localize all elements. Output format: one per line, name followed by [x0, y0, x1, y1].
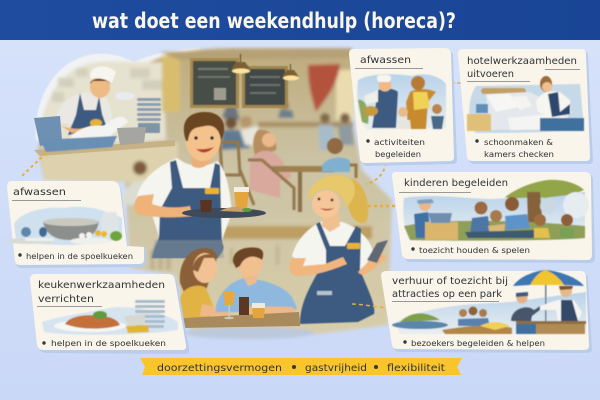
steel pot	[117, 127, 146, 145]
ribbon: qualities: flexibiliteit	[387, 363, 445, 374]
heading	[392, 276, 508, 302]
bullet text: toezicht houden & spelen	[419, 245, 530, 255]
bottles shelf	[150, 242, 303, 270]
ribbon: qualities: gastvrijheid	[305, 363, 367, 374]
heading: verhuur of toezicht bij	[392, 276, 508, 287]
illustration: bowl and bottle	[6, 207, 122, 245]
heading	[467, 56, 580, 82]
bullet text: activiteiten	[374, 137, 425, 147]
heading	[399, 178, 508, 193]
window and curtain	[308, 64, 354, 120]
header banner	[0, 0, 600, 40]
cafe backdrop and background furnishings	[38, 48, 392, 339]
illustration: helper with children	[357, 74, 446, 130]
card: hotelwerkzaamheden uitvoeren	[458, 49, 593, 164]
ribbon: qualities	[140, 358, 462, 375]
card: afwassen (left)	[6, 181, 146, 268]
heading: afwassen	[360, 55, 411, 66]
shadow under table	[185, 327, 315, 339]
shelf under counter	[40, 142, 178, 190]
person: female waiter with phone	[289, 175, 388, 324]
heading: kinderen begeleiden	[404, 178, 508, 189]
card: keukenwerkzaamheden verrichten	[30, 274, 189, 354]
heading: uitvoeren	[467, 69, 514, 80]
wall tiles	[52, 68, 162, 102]
card: kinderen begeleiden	[392, 172, 595, 263]
connector dots: to top card	[366, 163, 386, 184]
heading	[37, 280, 165, 307]
diner in pink with table and chairs	[220, 130, 356, 212]
chef kitchen wall	[42, 61, 166, 150]
card: afwassen (top)	[349, 48, 457, 166]
illustration: children under tree	[403, 180, 589, 241]
bullet text: helpen in de spoelkueken	[26, 251, 133, 261]
background diners	[220, 95, 354, 150]
scene halo	[36, 48, 200, 160]
dish stack	[137, 98, 161, 133]
serving tray with drinks	[182, 187, 266, 218]
illustration: park rental stand	[392, 270, 586, 334]
heading: hotelwerkzaamheden	[467, 56, 577, 67]
ribbon: qualities: doorzettingsvermogen	[157, 363, 282, 374]
illustration: making the bed	[467, 76, 584, 133]
table with drinks	[183, 291, 300, 328]
person: male waiter with tray	[134, 112, 232, 258]
title: wat doet een weekendhulp (horeca)?	[92, 9, 456, 33]
connector dots: waitress to verhuur card	[352, 304, 396, 309]
heading: verrichten	[38, 294, 94, 305]
chalkboards and lamps	[190, 54, 299, 108]
bullet text: begeleiden	[375, 149, 421, 159]
central illustration: cafe scene	[22, 48, 466, 339]
connector dots: cards afwassen to hotel	[445, 82, 466, 84]
bullet text: bezoekers begeleiden & helpen	[411, 338, 545, 348]
person: seated woman	[180, 248, 228, 318]
person: seated man	[216, 247, 297, 314]
seated boy at left	[122, 161, 150, 205]
back counter	[258, 122, 353, 127]
heading: afwassen	[13, 187, 66, 198]
bullet text: helpen in de spoelkueken	[51, 338, 166, 348]
bullet text: kamers checken	[484, 149, 554, 159]
apron fade	[150, 240, 224, 258]
bullet text: schoonmaken &	[484, 137, 554, 147]
bar counter	[222, 226, 372, 239]
bullet text	[475, 137, 554, 159]
bullet text	[366, 137, 425, 159]
heading: attracties op een park	[392, 289, 502, 300]
connector dots: chef to left card	[22, 153, 46, 176]
wash tray and foam	[40, 92, 135, 152]
illustration: plate of food	[42, 300, 178, 335]
ceiling	[160, 48, 352, 60]
connector dots: waitress to kinderen card	[368, 205, 402, 207]
card: verhuur of toezicht	[381, 270, 592, 353]
person: chef washing dishes	[56, 66, 116, 135]
heading: keukenwerkzaamheden	[38, 280, 165, 291]
diner in blue	[322, 138, 350, 172]
kitchen counter	[34, 140, 175, 156]
wash tub	[34, 116, 62, 146]
wood panel	[162, 56, 180, 112]
